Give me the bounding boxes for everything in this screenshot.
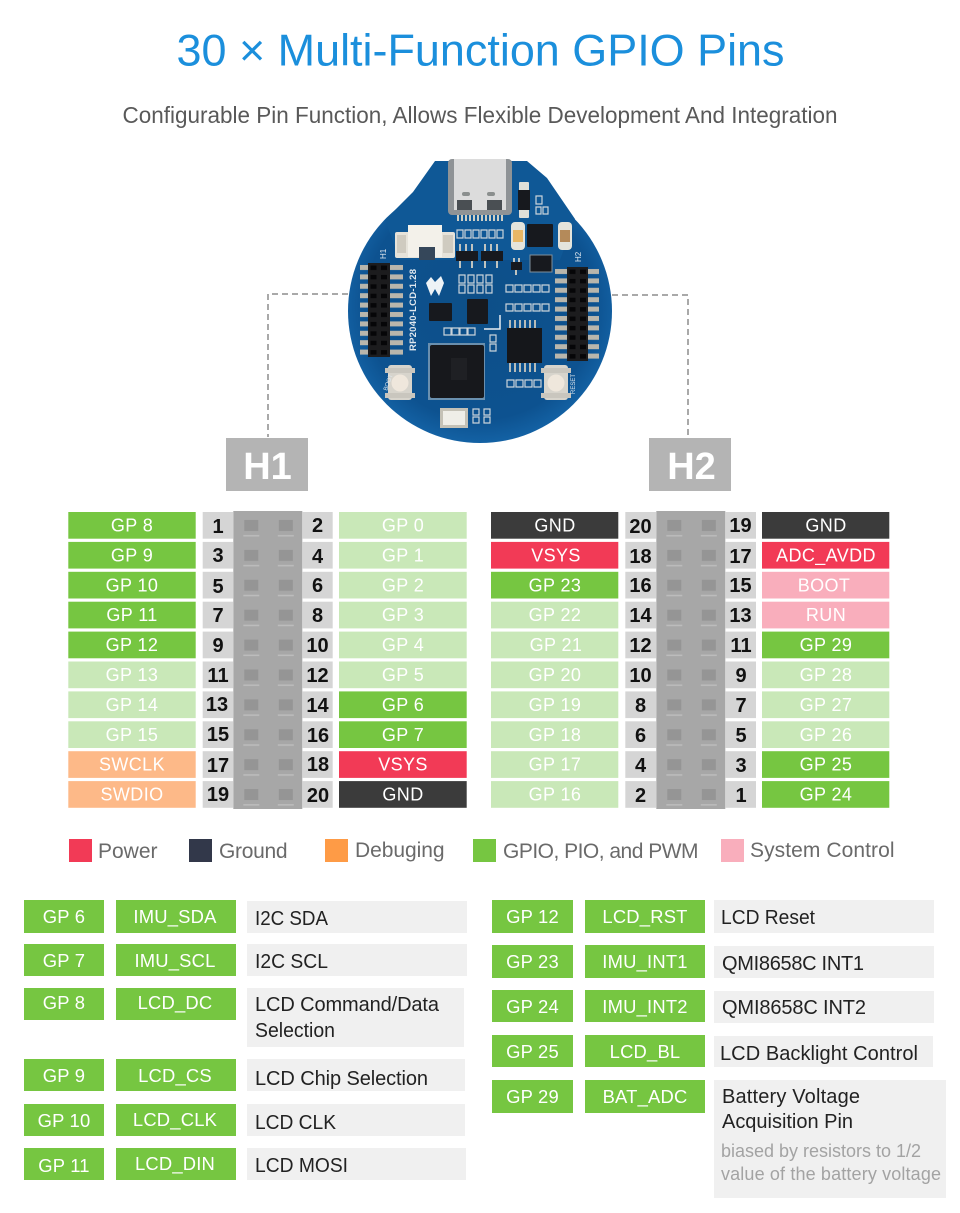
GP 11 row: LCD MOSI (255, 1155, 348, 1177)
GP 6 row: GP 6 (43, 906, 85, 927)
small SMD pads (444, 196, 549, 423)
header H2 on board (555, 267, 599, 361)
H1 row 19-20: SWDIO (100, 785, 164, 805)
H1 row 3-4: GP 9 (111, 545, 153, 565)
subtitle: Configurable Pin Function, Allows Flexible Development And Integration (122, 102, 838, 128)
H1 row 9-10: GP 12 (106, 635, 158, 655)
GP 29 row: value of the battery voltage (721, 1164, 941, 1184)
H1 row 13-14: GP 6 (382, 695, 424, 715)
GP 6 row (24, 900, 467, 933)
GP 8 row (24, 988, 464, 1047)
JST battery connector (395, 225, 455, 260)
panel: left pin function table (24, 900, 467, 1180)
GP 25 row: LCD_BL (610, 1041, 680, 1063)
H2 row 2-1: GP 24 (800, 785, 852, 805)
GP 24 row: QMI8658C INT2 (722, 997, 866, 1019)
GP 29 row (492, 1080, 946, 1198)
GP 29 row: BAT_ADC (603, 1086, 687, 1108)
silkscreen: H2: H2 (574, 251, 583, 262)
H2 row 4-3: 3 (735, 755, 747, 777)
H1 row 7-8: 8 (312, 605, 323, 627)
H2 row 8-7: 8 (635, 695, 646, 717)
GP 8 row: GP 8 (43, 992, 85, 1013)
board photo: round RP2040 LCD PCB (348, 159, 612, 443)
legend (69, 839, 895, 863)
H1 row 3-4 (68, 542, 467, 569)
H2 label (649, 438, 731, 491)
legend: debugging: Debuging (355, 839, 445, 862)
H2 row 4-3: GP 17 (529, 755, 581, 775)
GP 11 row: GP 11 (38, 1155, 90, 1176)
logo (426, 276, 444, 296)
GP 7 row: GP 7 (43, 950, 85, 971)
GP 10 row: LCD_CLK (133, 1109, 218, 1131)
H2 row 20-19: 19 (729, 515, 752, 537)
H1 row 9-10: 9 (212, 635, 224, 657)
H1 row 15-16: 16 (307, 725, 329, 747)
H1 row 5-6: GP 2 (382, 575, 424, 595)
H1 row 13-14: GP 14 (106, 695, 158, 715)
GP 6 row: IMU_SDA (133, 906, 217, 928)
H2 row 2-1: 1 (735, 785, 747, 807)
H1 row 3-4: GP 1 (382, 545, 424, 565)
panel: H1 pinout (68, 511, 467, 809)
H2 row 10-9: 10 (629, 665, 652, 687)
H1 row 15-16: GP 7 (382, 725, 424, 745)
GP 11 row (24, 1148, 466, 1180)
GP 6 row: I2C SDA (255, 908, 329, 930)
H2 row 12-11: GP 29 (800, 635, 852, 655)
H2 row 10-9: GP 28 (800, 665, 852, 685)
H1 row 17-18: SWCLK (99, 755, 165, 775)
small chips (429, 224, 553, 324)
GP 25 row: GP 25 (506, 1041, 559, 1062)
H1 row 11-12: 11 (207, 665, 229, 687)
H2 row 4-3: 4 (635, 755, 647, 777)
H2 row 4-3: GP 25 (800, 755, 852, 775)
silkscreen: BOOT: BOOT (383, 373, 395, 392)
TSSOP chip (507, 320, 542, 372)
H2 row 14-13 (491, 602, 889, 628)
GP 7 row: IMU_SCL (134, 950, 216, 972)
H1 row 11-12: 12 (306, 665, 329, 687)
H2 row 18-17 (491, 542, 889, 569)
H2 row 16-15: 15 (729, 575, 752, 597)
GP 25 row: LCD Backlight Control (720, 1043, 918, 1065)
H1 row 11-12: GP 13 (106, 665, 158, 685)
H2 row 6-5: 5 (735, 725, 747, 747)
GP 29 row: biased by resistors to 1/2 (721, 1141, 921, 1161)
GP 24 row: IMU_INT2 (602, 996, 688, 1018)
H1 row 13-14: 14 (306, 695, 329, 717)
H2 row 4-3 (491, 751, 889, 778)
H2 row 10-9: GP 20 (529, 665, 581, 685)
H2 row 2-1: 2 (635, 785, 646, 807)
H1 row 7-8 (68, 602, 467, 628)
H1 row 17-18: 17 (207, 755, 229, 777)
H2 row 16-15: 16 (629, 575, 652, 597)
H2 row 10-9: 9 (735, 665, 747, 687)
GP 23 row: QMI8658C INT1 (722, 953, 864, 975)
H2 row 8-7: GP 19 (529, 695, 581, 715)
H2 row 2-1 (491, 781, 889, 808)
H2 row 14-13: GP 22 (529, 605, 581, 625)
H2 row 16-15: BOOT (798, 575, 850, 595)
H1 row 19-20 (68, 781, 467, 808)
H2 row 10-9 (491, 662, 889, 688)
H1 row 17-18: 18 (307, 754, 329, 776)
title: 30 × Multi-Function GPIO Pins (176, 26, 784, 76)
H2 row 18-17: ADC_AVDD (776, 545, 876, 566)
legend: power (69, 839, 158, 863)
GP 12 row (492, 900, 934, 933)
connector line: board to H1 (268, 294, 348, 437)
H2 row 2-1: GP 16 (529, 785, 581, 805)
H1 row 7-8: 7 (212, 605, 224, 627)
GP 7 row (24, 944, 467, 976)
H2 row 12-11: 12 (629, 635, 652, 657)
diode (518, 182, 530, 218)
panel: H2 pinout (491, 511, 889, 809)
H1 row 19-20: GND (382, 785, 424, 805)
H2 row 16-15: GP 23 (529, 575, 581, 595)
GP 8 row: LCD Command/Data (255, 994, 440, 1016)
H1 row 19-20: 19 (207, 784, 229, 806)
H1 row 5-6 (68, 572, 467, 598)
GP 10 row: LCD CLK (255, 1112, 337, 1134)
H2 row 6-5: GP 18 (529, 725, 581, 745)
header H1 on board (360, 263, 403, 357)
GP 23 row: IMU_INT1 (602, 951, 688, 973)
H2 row 18-17: 17 (729, 546, 752, 568)
H1 row 15-16: 15 (207, 724, 229, 746)
H1 row 11-12 (68, 662, 467, 688)
H2 row 18-17: 18 (629, 546, 652, 568)
H2 row 8-7 (491, 691, 889, 718)
H1 row 9-10: 10 (306, 635, 329, 657)
crystal (440, 408, 468, 428)
H1 row 3-4: 4 (312, 546, 324, 568)
H1 row 17-18 (68, 751, 467, 778)
GP 10 row (24, 1104, 465, 1136)
GP 9 row: LCD Chip Selection (255, 1068, 428, 1090)
USB-C connector (448, 159, 512, 221)
H2 row 14-13: RUN (806, 605, 846, 625)
H1 row 7-8: GP 11 (106, 605, 158, 625)
H1 row 9-10: GP 4 (382, 635, 424, 655)
H1 row 5-6: 5 (212, 576, 224, 598)
legend: ground (189, 839, 288, 863)
GP 23 row (492, 945, 934, 978)
H1 row 1-2 (68, 512, 467, 539)
H2 row 12-11: 11 (730, 635, 752, 657)
H2 row 6-5 (491, 721, 889, 748)
GP 8 row: Selection (255, 1020, 335, 1042)
BOOT button (385, 365, 415, 400)
H2 row 20-19: GND (805, 516, 847, 536)
GP 23 row: GP 23 (506, 951, 559, 972)
panel: right pin function table (492, 900, 946, 1198)
H1 row 13-14 (68, 691, 467, 718)
H2 row 8-7: 7 (735, 695, 747, 717)
H1 row 11-12: GP 5 (382, 665, 424, 685)
GP 8 row: LCD_DC (138, 992, 212, 1014)
silkscreen: H1: H1 (379, 248, 388, 259)
H1 label (226, 438, 308, 491)
main RP2040 chip (428, 343, 485, 400)
H2 row 16-15 (491, 572, 889, 598)
H1 row 15-16 (68, 721, 467, 748)
GP 25 row (492, 1035, 933, 1067)
H1 row 1-2: GP 8 (111, 516, 153, 536)
H2 row 8-7: GP 27 (800, 695, 852, 715)
H1 row 15-16: GP 15 (106, 725, 158, 745)
GP 12 row: GP 12 (506, 906, 559, 927)
H2 row 14-13: 14 (629, 605, 652, 627)
GP 24 row: GP 24 (506, 996, 559, 1017)
H2 row 14-13: 13 (729, 605, 752, 627)
GP 11 row: LCD_DIN (135, 1153, 215, 1175)
silkscreen: RESET: RESET (571, 374, 577, 394)
H1 row 1-2: 2 (312, 515, 323, 537)
H1 connector socket (233, 511, 302, 809)
GP 12 row: LCD Reset (721, 907, 815, 929)
GP 12 row: LCD_RST (602, 906, 688, 928)
legend: system control: System Control (750, 839, 895, 862)
H1 row 1-2: 1 (212, 516, 224, 538)
H1 row 7-8: GP 3 (382, 605, 424, 625)
legend: GPIO: GPIO, PIO, and PWM (503, 840, 699, 863)
capacitors (511, 222, 572, 250)
H1 row 17-18: VSYS (378, 755, 428, 775)
H2 row 20-19 (491, 512, 889, 539)
legend: power: Power (98, 840, 158, 863)
H1 row 5-6: GP 10 (106, 575, 158, 595)
GP 9 row: GP 9 (43, 1065, 85, 1086)
H1 row 13-14: 13 (206, 694, 228, 716)
H1 row 9-10 (68, 632, 467, 658)
H2 row 12-11: GP 21 (530, 635, 582, 655)
RESET button (541, 365, 571, 400)
H2 row 6-5: GP 26 (800, 725, 852, 745)
H2 row 20-19: 20 (629, 516, 652, 538)
H1 row 1-2: GP 0 (382, 516, 424, 536)
IMU axes (484, 315, 500, 329)
H2 row 12-11 (491, 632, 889, 658)
GP 7 row: I2C SCL (255, 951, 328, 973)
GP 29 row: Battery Voltage (722, 1086, 860, 1108)
H2 row 18-17: VSYS (531, 545, 581, 565)
SOT chip legs (460, 244, 519, 275)
GP 29 row: Acquisition Pin (722, 1111, 853, 1133)
GP 9 row: LCD_CS (138, 1065, 212, 1087)
H2 label: H2 (667, 446, 716, 488)
connector line: board to H2 (612, 295, 688, 437)
GP 24 row (492, 990, 934, 1023)
GP 10 row: GP 10 (38, 1110, 90, 1131)
silkscreen: board name: RP2040-LCD-1.28 (408, 269, 419, 351)
H2 row 6-5: 6 (635, 725, 646, 747)
H2 row 20-19: GND (534, 516, 576, 536)
legend: ground: Ground (219, 840, 288, 863)
GP 29 row: GP 29 (506, 1086, 559, 1107)
H1 label: H1 (243, 446, 292, 488)
H1 row 3-4: 3 (212, 545, 224, 567)
GP 9 row (24, 1059, 465, 1091)
H2 connector socket (656, 511, 725, 809)
H1 row 5-6: 6 (312, 575, 323, 597)
H1 row 19-20: 20 (307, 785, 329, 807)
